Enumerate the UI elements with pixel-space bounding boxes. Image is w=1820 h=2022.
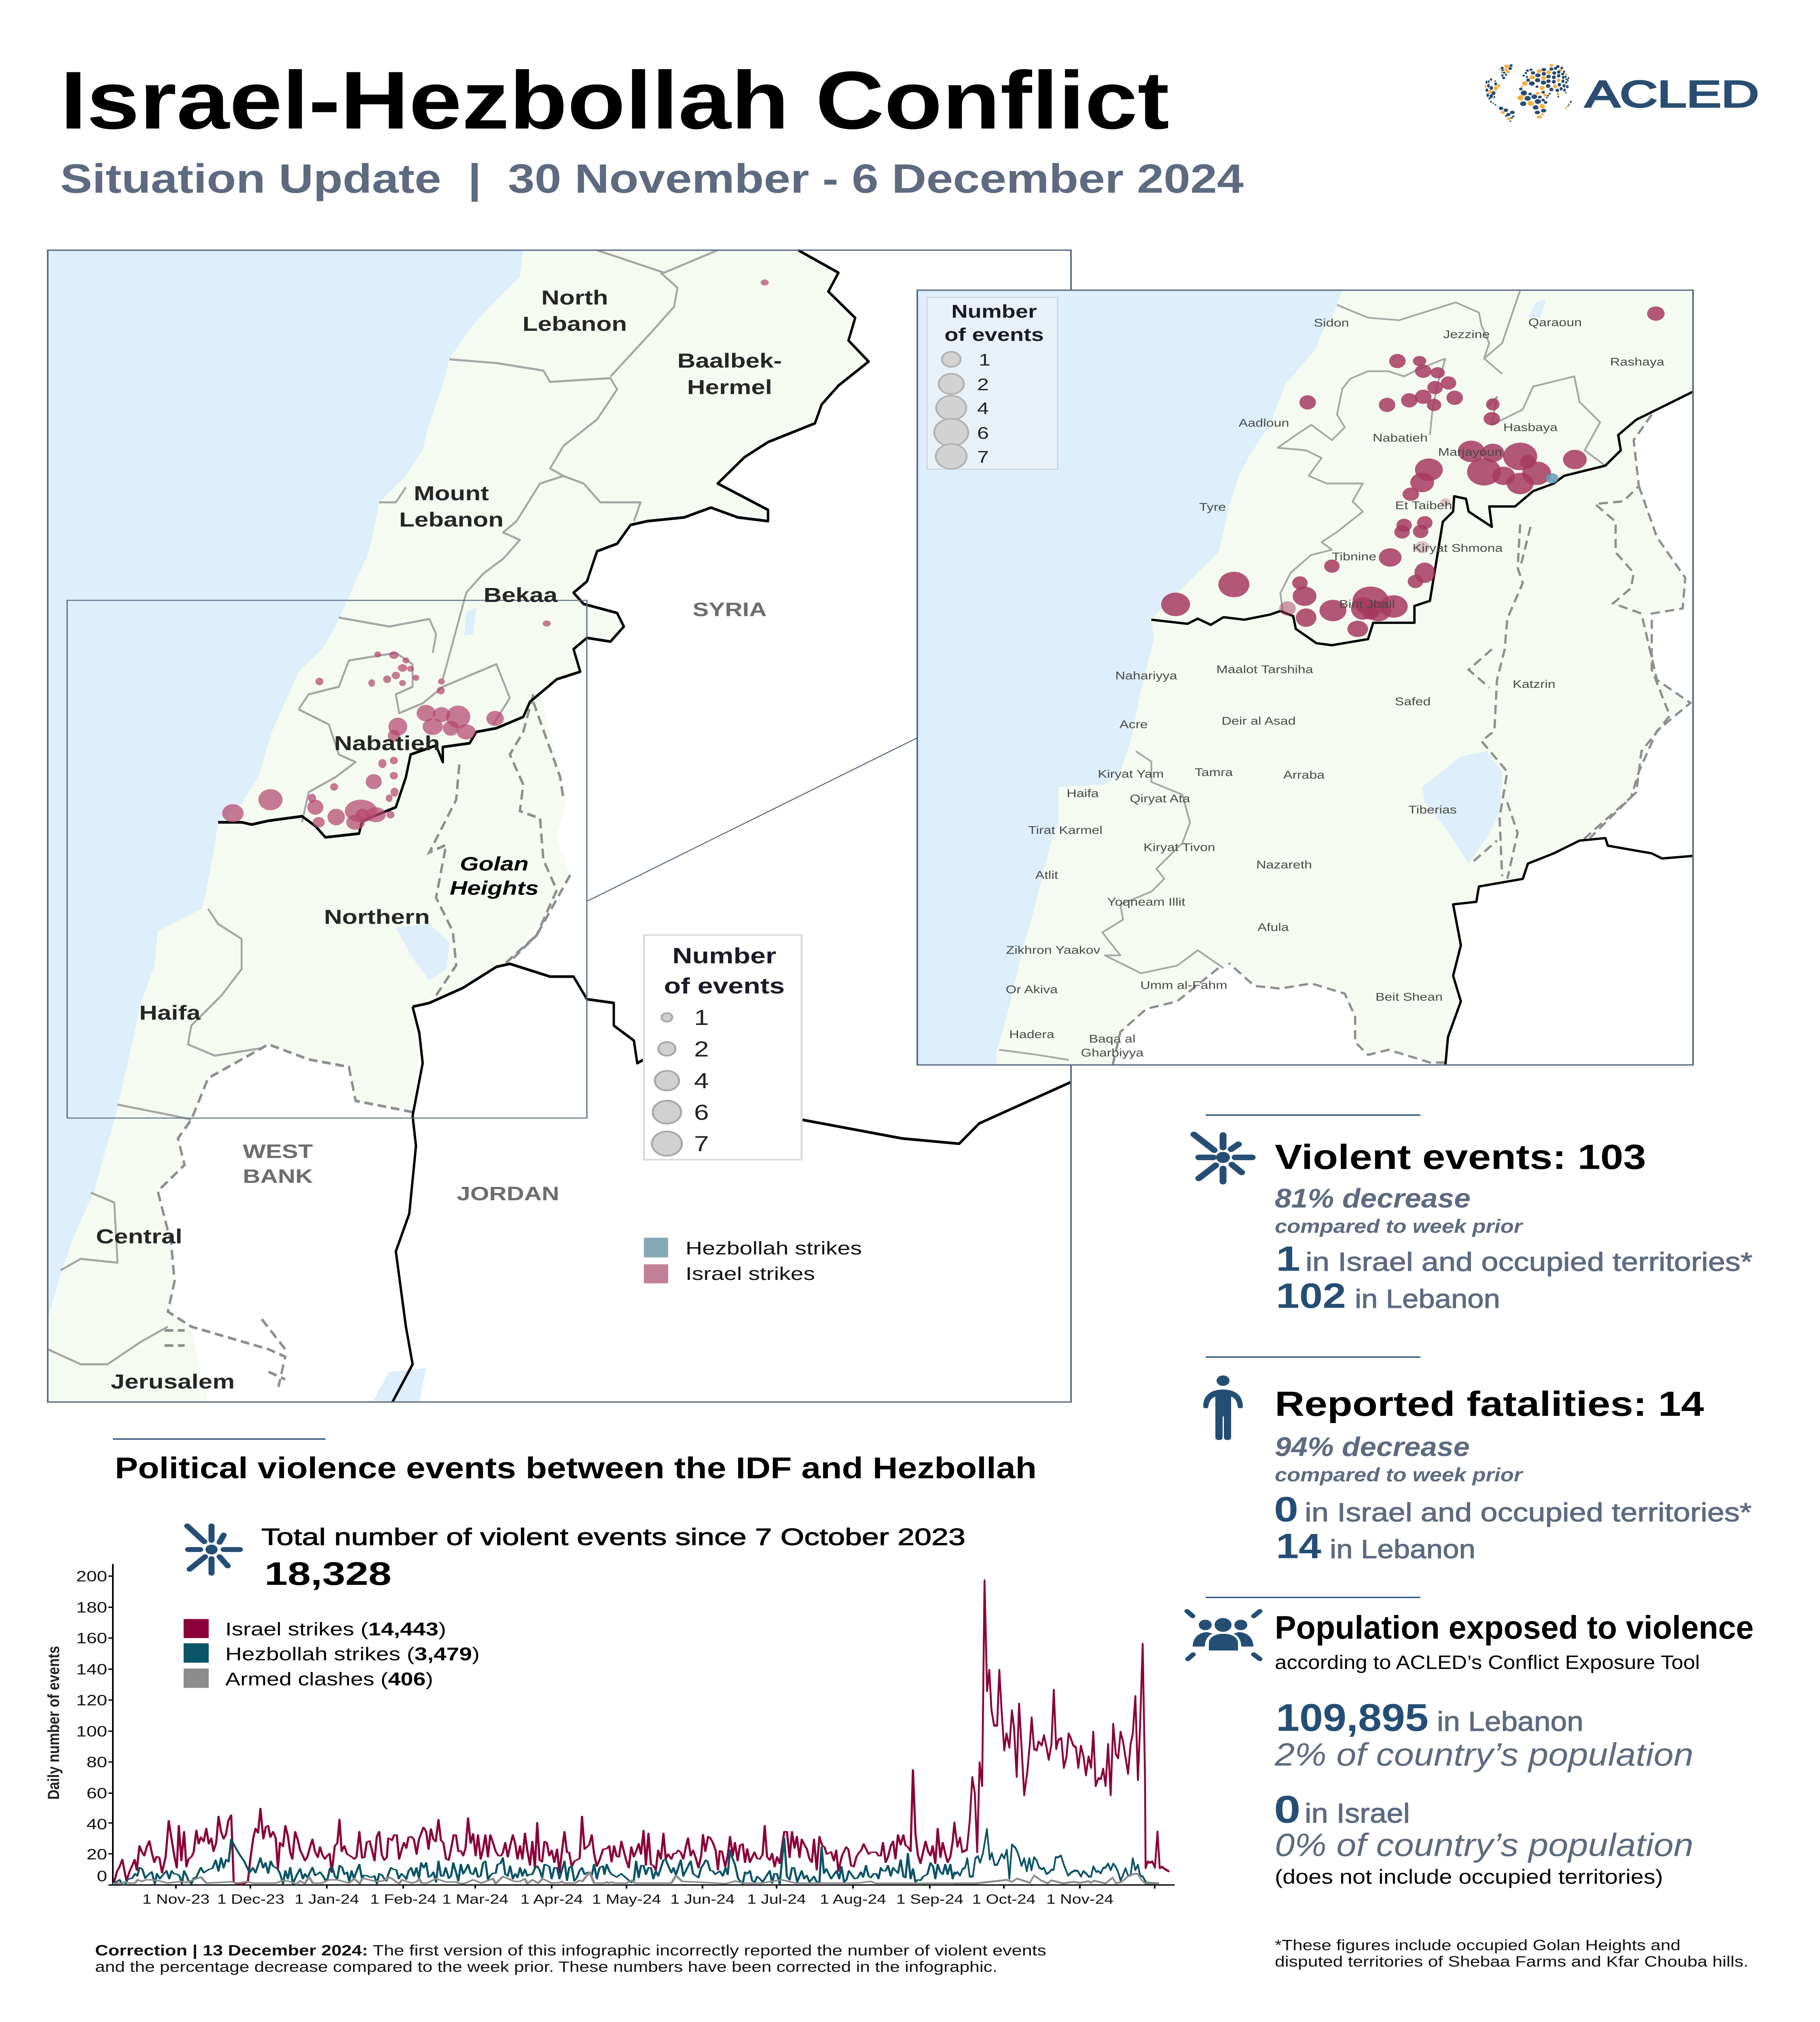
footnote: *These figures include occupied Golan Heights and [1275, 1937, 1680, 1953]
chart legend: Armed clashes (406) [225, 1669, 433, 1689]
inset city labels: Tyre [1199, 501, 1226, 513]
panel: fatalities: in Lebanon [1330, 1535, 1475, 1564]
heading: Violent events: 103 [1275, 1138, 1646, 1176]
breakdown: 1 [1276, 1239, 1300, 1278]
inset city labels: Tamra [1195, 766, 1233, 778]
total label: Total number of violent events since 7 October 2023 [261, 1524, 965, 1550]
subtitle: Situation Update | 30 November - 6 December 2024 [60, 156, 1244, 202]
inset city labels: Deir al Asad [1221, 715, 1296, 727]
legend: number of events: of events [664, 974, 785, 998]
panel: population exposed: in Israel [1305, 1798, 1410, 1829]
y axis labels: 60 [87, 1785, 107, 1802]
footnote [1275, 1937, 1748, 1970]
legend: number of events: 6 [694, 1100, 709, 1124]
inset city labels: Arraba [1283, 769, 1325, 781]
inset city labels: Gharbiyya [1081, 1046, 1144, 1059]
title: Israel-Hezbollah Conflict [60, 55, 1169, 146]
inset lakes [1422, 300, 1546, 863]
panel: population exposed: (does not include occupied territories) [1275, 1865, 1663, 1888]
lakes [372, 608, 476, 1402]
legend: strike types [644, 1238, 862, 1284]
inset city labels: Qiryat Ata [1130, 792, 1190, 805]
panel: violent events [1194, 1115, 1752, 1316]
dashed disputed lines [158, 694, 570, 1387]
y axis labels [76, 1567, 107, 1885]
legend: number of events: Number [673, 943, 776, 969]
legend: number of events: 1 [694, 1005, 709, 1030]
inset legend: 2 [977, 375, 989, 394]
region labels: North [541, 286, 608, 309]
international borders [218, 250, 1071, 1402]
panel: population exposed [1187, 1597, 1754, 1888]
y axis title: Daily number of events [44, 1646, 63, 1800]
inset city labels: Afula [1257, 921, 1289, 933]
percent change: 81% decrease [1275, 1183, 1471, 1213]
panel: fatalities: compared to week prior [1275, 1464, 1524, 1486]
x axis labels: 1 Aug-24 [820, 1891, 886, 1906]
inset dashed lines [1113, 415, 1691, 1065]
x axis labels: 1 Mar-24 [442, 1891, 508, 1906]
region labels: Golan [460, 853, 529, 875]
inset city labels: Aadloun [1239, 417, 1289, 429]
inset city labels: Bint Jbail [1339, 598, 1395, 610]
x axis labels: 1 May-24 [592, 1891, 661, 1906]
inset city labels: Atlit [1035, 869, 1058, 881]
region labels: Jerusalem [111, 1370, 235, 1393]
region labels: Heights [450, 877, 539, 899]
footnote: disputed territories of Shebaa Farms and Kfar Chouba hills. [1275, 1953, 1748, 1970]
inset legend: of events [944, 324, 1044, 345]
region labels: Nabatieh [334, 732, 440, 755]
inset city labels: Tibnine [1332, 550, 1376, 563]
x axis labels [142, 1891, 1113, 1906]
y axis labels: 140 [76, 1661, 107, 1678]
x axis labels: 1 Dec-23 [217, 1891, 284, 1906]
region labels: Baalbek- [677, 349, 782, 372]
panel: violent events: 102 [1276, 1276, 1346, 1316]
panel: violent events: in Israel and occupied territories* [1306, 1248, 1752, 1277]
y axis labels: 100 [76, 1723, 107, 1740]
heading: Reported fatalities: 14 [1275, 1385, 1704, 1423]
region labels: Hermel [687, 376, 772, 398]
inset sea [917, 290, 1342, 1065]
x axis labels: 1 Feb-24 [370, 1891, 436, 1906]
region labels: BANK [243, 1165, 313, 1187]
panel: population exposed: 2% of country’s population [1274, 1736, 1693, 1772]
panel: violent events: in Lebanon [1355, 1284, 1500, 1313]
inset city labels: Kiryat Tivon [1143, 841, 1215, 854]
inset city labels: Haifa [1067, 787, 1099, 799]
y axis labels: 200 [76, 1567, 107, 1584]
x axis labels: 1 Sep-24 [896, 1891, 963, 1906]
region labels: Bekaa [484, 584, 558, 606]
inset outline [67, 601, 587, 1118]
region labels: Northern [324, 905, 430, 928]
breakdown: 0 [1274, 1489, 1298, 1529]
y axis labels: 80 [87, 1753, 107, 1770]
inset city labels: Hasbaya [1503, 421, 1558, 434]
inset city labels: Maalot Tarshiha [1216, 663, 1314, 676]
admin borders [48, 250, 718, 1364]
inset admin borders [999, 290, 1605, 1060]
inset city labels: Tiberias [1408, 804, 1457, 816]
legend: number of events: 2 [694, 1037, 709, 1061]
inset city labels: Katzrin [1513, 678, 1555, 690]
inset city labels: Zikhron Yaakov [1006, 944, 1100, 956]
correction note: Correction | 13 December 2024: The first version of this infographic incorrectly reported the number of violent events [95, 1942, 1046, 1959]
y axis labels: 20 [87, 1846, 107, 1863]
land [48, 250, 869, 1402]
inset city labels: Umm al-Fahm [1140, 979, 1227, 992]
inset city labels: Beit Shean [1376, 991, 1443, 1003]
y axis labels: 0 [97, 1868, 107, 1885]
Israel figures: 0 [1274, 1788, 1301, 1831]
inset city labels: Yoqneam Illit [1107, 895, 1185, 908]
inset city labels: Baqa al [1089, 1032, 1136, 1045]
x axis labels: 1 Apr-24 [521, 1891, 583, 1906]
inset city labels: Et Taibeh [1395, 499, 1452, 512]
legend: strike types: Hezbollah strikes [686, 1238, 862, 1258]
icon: burst small [187, 1526, 240, 1573]
x axis labels: 1 Jun-24 [670, 1891, 735, 1906]
inset city labels [1006, 316, 1665, 1059]
series: Hezbollah strikes [114, 1829, 1158, 1885]
x axis labels: 1 Oct-24 [972, 1891, 1036, 1906]
inset city labels: Sidon [1314, 317, 1349, 329]
sea [48, 250, 523, 1319]
logo: ACLED [1485, 64, 1759, 122]
inset legend: 7 [977, 448, 989, 467]
correction note: and the percentage decrease compared to the week prior. These numbers have been corrected in the infographic. [95, 1958, 997, 1975]
inset city labels: Nazareth [1256, 859, 1312, 871]
region labels: Lebanon [399, 508, 504, 531]
Lebanon figures: 109,895 [1276, 1696, 1428, 1739]
icon: people [1187, 1611, 1260, 1659]
inset land [997, 290, 1693, 1065]
inset city labels: Hadera [1009, 1028, 1055, 1041]
x axis labels: 1 Nov-24 [1046, 1891, 1113, 1906]
inset city labels: Safed [1395, 695, 1431, 708]
inset city labels: Rashaya [1610, 355, 1665, 368]
legend: number of events [644, 935, 802, 1160]
connector line [587, 738, 917, 901]
panel: fatalities: 14 [1276, 1526, 1321, 1565]
region labels: Lebanon [523, 313, 627, 335]
panel: population exposed: 0% of country’s population [1275, 1827, 1693, 1863]
y axis labels: 40 [87, 1815, 107, 1832]
panel: inset map [917, 290, 1693, 1065]
axes [108, 1564, 1175, 1889]
inset legend: 6 [977, 423, 989, 443]
inset city labels: Kiryat Shmona [1413, 542, 1503, 554]
region labels: Central [96, 1225, 182, 1248]
inset borders [1151, 391, 1693, 1065]
inset city labels: Or Akiva [1006, 983, 1058, 996]
inset city labels: Qaraoun [1528, 316, 1582, 329]
x axis labels: 1 Nov-23 [142, 1891, 210, 1906]
y axis labels: 120 [76, 1692, 107, 1709]
inset legend: 1 [979, 351, 990, 370]
panel: fatalities [1203, 1356, 1752, 1565]
region labels: SYRIA [692, 599, 767, 620]
panel: violent events: compared to week prior [1275, 1216, 1524, 1237]
legend: number of events: 7 [694, 1132, 709, 1156]
x axis labels: 1 Jan-24 [294, 1891, 359, 1906]
inset city labels: Kiryat Yam [1098, 768, 1164, 780]
logo: ACLED: ACLED [1585, 73, 1759, 115]
inset city labels: Nahariyya [1115, 669, 1177, 682]
chart legend: Israel strikes (14,443) [225, 1619, 446, 1639]
event bubbles [222, 279, 769, 830]
correction note [95, 1942, 1046, 1975]
inset city labels: Tirat Karmel [1028, 824, 1103, 836]
icon: person [1203, 1375, 1243, 1440]
panel: population exposed: in Lebanon [1437, 1706, 1583, 1737]
region labels: Mount [414, 482, 489, 505]
inset city labels: Acre [1120, 718, 1148, 731]
inset city labels: Jezzine [1443, 328, 1490, 341]
chart legend: Hezbollah strikes (3,479) [225, 1644, 480, 1665]
inset legend [927, 297, 1058, 469]
panel: population exposed: according to ACLED’s Conflict Exposure Tool [1275, 1651, 1700, 1673]
section: political violence chart [44, 1438, 1175, 1906]
y axis labels: 160 [76, 1630, 107, 1647]
legend: strike types: Israel strikes [686, 1263, 815, 1284]
icon: burst [1194, 1134, 1252, 1182]
region labels [96, 286, 782, 1393]
inset legend: 4 [977, 399, 989, 418]
region labels: JORDAN [457, 1183, 559, 1205]
series: Israel strikes [114, 1580, 1168, 1884]
chart legend [184, 1619, 480, 1689]
total value: 18,328 [265, 1556, 392, 1592]
panel: fatalities: in Israel and occupied territories* [1305, 1498, 1752, 1527]
x axis labels: 1 Jul-24 [747, 1891, 806, 1906]
region labels: WEST [243, 1140, 313, 1162]
inset legend: Number [951, 301, 1037, 321]
inset city labels: Marjayoun [1438, 446, 1502, 458]
percent change: 94% decrease [1275, 1432, 1470, 1462]
region labels: Haifa [139, 1001, 201, 1024]
series: armed clashes [114, 1872, 1158, 1884]
inset bubbles [1161, 307, 1665, 637]
panel: main map [48, 250, 1071, 1402]
y axis labels: 180 [76, 1599, 107, 1616]
inset city labels: Nabatieh [1373, 431, 1428, 444]
legend: number of events: 4 [694, 1069, 709, 1093]
chart heading: Political violence events between the IDF and Hezbollah [115, 1451, 1037, 1485]
